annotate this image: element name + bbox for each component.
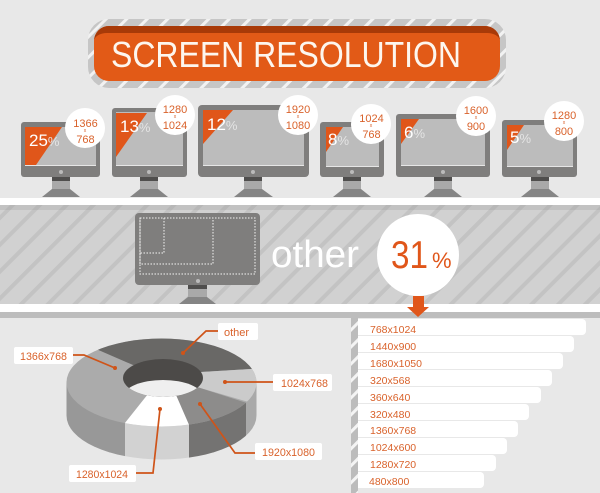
list bar: 1024x600: [358, 438, 507, 454]
callout: 1920x1080: 1920x1080: [262, 447, 315, 459]
monitor: 1280x1024 13%: 1280: [163, 104, 187, 116]
monitor: 1600x900 6%: 6%: [404, 123, 425, 142]
list bar: 1680x1050: [358, 353, 563, 370]
list bar: 1280x720: 1280x720: [370, 459, 416, 471]
monitor: 1280x800 5%: 5%: [510, 128, 531, 147]
monitor: 1920x1080 12%: 1080: [286, 120, 310, 132]
callout: other: other: [224, 327, 249, 339]
callout: 1024x768: 1024x768: [281, 378, 328, 390]
list bar: 320x480: 320x480: [370, 409, 410, 421]
list bar: 1360x768: 1360x768: [370, 425, 416, 437]
monitor: 1280x1024 13%: x: [174, 114, 177, 120]
list bar: 1280x720: [358, 455, 496, 471]
panel: resolution list: [351, 318, 586, 493]
callout: 31 percent: 31: [391, 234, 428, 277]
monitor: 1366x768 25%: [21, 108, 105, 197]
callout: 1366x768: [14, 347, 117, 370]
panel: other band: [0, 198, 600, 318]
title banner: [88, 19, 506, 88]
monitor: 1600x900 6%: [396, 96, 496, 197]
list bar: 1680x1050: 1680x1050: [370, 358, 422, 370]
monitor: 1920x1080 12%: 12%: [207, 115, 238, 134]
monitor: 1920x1080 12%: [198, 95, 318, 197]
list bar: 480x800: 480x800: [369, 476, 409, 488]
monitor: 1024x768 8%: 8%: [328, 130, 349, 149]
callout: 1366x768: 1366x768: [20, 351, 67, 363]
callout: 1920x1080: [198, 402, 322, 460]
monitor: 1280x1024 13%: [112, 95, 195, 197]
monitor: 1280x1024 13%: 13%: [120, 117, 151, 136]
monitor: 1600x900 6%: 1600: [464, 105, 488, 117]
list bar: 768x1024: [358, 319, 586, 336]
monitor: 1366x768 25%: x: [84, 128, 87, 134]
callout: 31 percent: [377, 214, 459, 296]
list bar: 320x480: [358, 404, 529, 421]
monitor: 1600x900 6%: 900: [467, 121, 485, 133]
list bar: 1440x900: 1440x900: [370, 341, 416, 353]
chart: 3D donut: [66, 338, 256, 460]
callout: 1280x1024: [69, 407, 162, 482]
callout: 31 percent: %: [432, 248, 452, 273]
monitor: 1280x800 5%: 1280: [552, 110, 576, 122]
monitor: 1024x768 8%: x: [370, 123, 373, 129]
monitor: 1600x900 6%: x: [475, 115, 478, 121]
title text: SCREEN RESOLUTION: [111, 34, 461, 75]
list bar: 320x568: 320x568: [370, 375, 410, 387]
monitor: 1024x768 8%: 1024: [359, 113, 384, 125]
list bar: 360x640: [358, 387, 541, 404]
monitor: 1280x1024 13%: 1024: [163, 120, 187, 132]
callout: 1280x1024: 1280x1024: [76, 469, 128, 481]
list bar: 1360x768: [358, 421, 518, 437]
list bar: 360x640: 360x640: [370, 392, 410, 404]
icon: large monitor with dotted screen sizes: [135, 213, 260, 304]
list bar: 768x1024: 768x1024: [370, 324, 416, 336]
list bar: 480x800: [358, 472, 484, 488]
list bar: 1440x900: [358, 336, 574, 353]
monitor: 1280x800 5%: 800: [555, 126, 573, 138]
heading: other: other: [271, 234, 359, 276]
callout: other: [181, 323, 258, 355]
callout: 1024x768: [223, 374, 332, 391]
monitor: 1920x1080 12%: x: [297, 114, 300, 120]
monitor: 1366x768 25%: 768: [76, 134, 95, 146]
arrow: down to list: [407, 296, 429, 317]
monitor: 1024x768 8%: [320, 104, 391, 197]
monitor: 1024x768 8%: 768: [362, 129, 381, 141]
monitor: 1280x800 5%: [502, 101, 584, 197]
monitor: 1280x800 5%: x: [563, 120, 566, 126]
monitor: 1366x768 25%: 25%: [29, 131, 60, 150]
list bar: 1024x600: 1024x600: [370, 442, 416, 454]
monitor: 1920x1080 12%: 1920: [286, 104, 310, 116]
monitor: 1366x768 25%: 1366: [73, 118, 98, 130]
list bar: 320x568: [358, 370, 552, 387]
